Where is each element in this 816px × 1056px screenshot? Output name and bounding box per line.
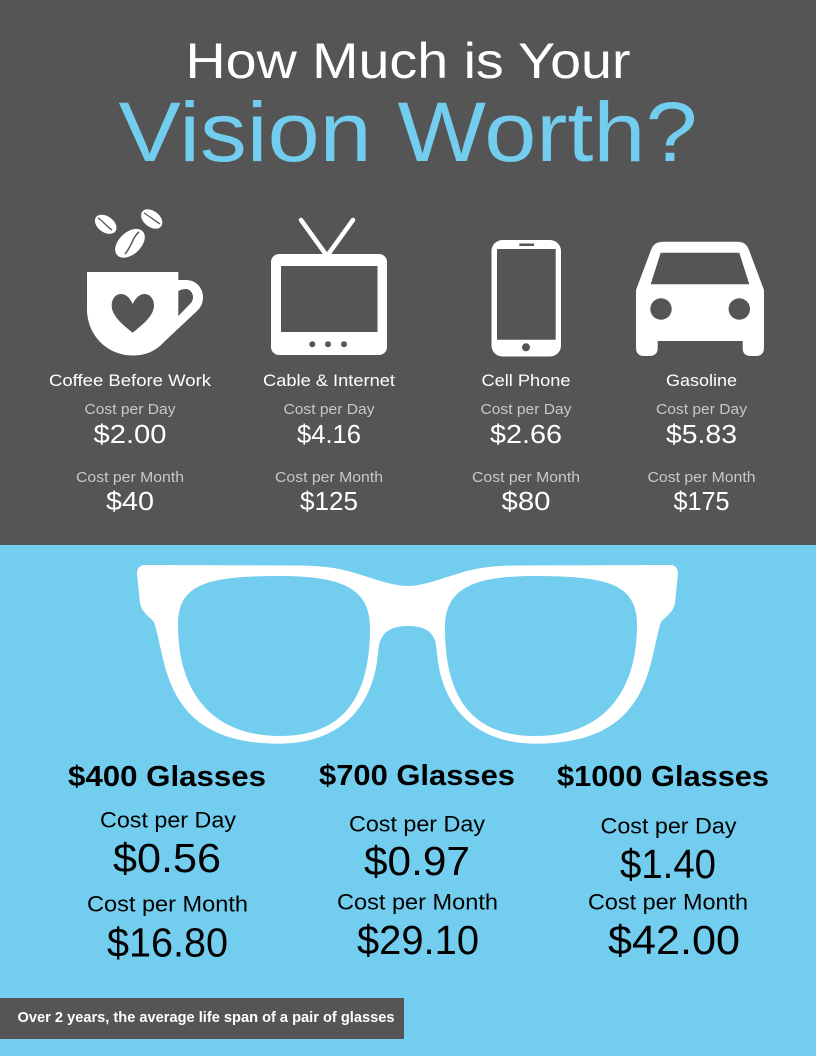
- text block: cable costs: Cost per Month: [275, 469, 383, 486]
- text block: $700 glasses: Cost per Month: [337, 890, 498, 914]
- text block: coffee costs: $40: [106, 486, 154, 516]
- text block: $1000 glasses: $42.00: [608, 917, 740, 963]
- text block: $700 glasses: $700 Glasses: [319, 760, 515, 792]
- icon: smartphone: [492, 240, 561, 357]
- callout: footnote bar: [0, 998, 404, 1039]
- icon: coffee cup with beans: [87, 205, 203, 356]
- text block: cell phone costs: [472, 371, 580, 516]
- title: Vision Worth?: [118, 85, 698, 179]
- text block: cable costs: Cable & Internet: [263, 371, 395, 390]
- text block: $1000 glasses: Cost per Day: [600, 814, 736, 838]
- title: [118, 33, 698, 179]
- text block: $700 glasses: [319, 760, 515, 963]
- text block: gasoline costs: [648, 371, 756, 516]
- text block: coffee costs: Coffee Before Work: [49, 371, 212, 390]
- text block: $1000 glasses: [557, 761, 769, 963]
- text block: $400 glasses: $0.56: [113, 835, 221, 881]
- icon: eyeglasses: [137, 565, 678, 744]
- text block: cell phone costs: $2.66: [490, 419, 562, 449]
- text block: cable costs: [263, 371, 395, 516]
- text block: gasoline costs: Gasoline: [666, 371, 737, 390]
- callout: footnote bar: Over 2 years, the average life span of a pair of glasses: [18, 1009, 394, 1026]
- panel: blue glasses background: [0, 545, 816, 1056]
- panel: dark header background: [0, 0, 816, 545]
- text block: $400 glasses: $400 Glasses: [68, 761, 266, 793]
- text block: $400 glasses: Cost per Month: [87, 892, 248, 916]
- text block: cable costs: $125: [300, 486, 358, 516]
- text block: coffee costs: Cost per Month: [76, 469, 184, 486]
- text block: $1000 glasses: $1000 Glasses: [557, 761, 769, 793]
- title: How Much is Your: [186, 33, 630, 89]
- text block: gasoline costs: $175: [674, 486, 730, 516]
- text block: cell phone costs: Cell Phone: [482, 371, 570, 390]
- text block: gasoline costs: $5.83: [666, 419, 737, 449]
- text block: $1000 glasses: Cost per Month: [588, 890, 748, 914]
- text block: coffee costs: $2.00: [94, 419, 166, 449]
- text block: $700 glasses: $29.10: [357, 917, 479, 963]
- icon: television: [271, 220, 387, 355]
- text block: cable costs: Cost per Day: [284, 401, 375, 418]
- text block: $700 glasses: $0.97: [364, 838, 470, 884]
- text block: $700 glasses: Cost per Day: [349, 812, 485, 836]
- text block: $1000 glasses: $1.40: [620, 841, 716, 887]
- text block: cell phone costs: $80: [502, 486, 550, 516]
- text block: gasoline costs: Cost per Day: [656, 401, 748, 418]
- text block: gasoline costs: Cost per Month: [648, 469, 756, 486]
- text block: $400 glasses: $16.80: [107, 920, 228, 966]
- text block: $400 glasses: Cost per Day: [100, 808, 236, 832]
- text block: coffee costs: [49, 371, 212, 516]
- text block: $400 glasses: [68, 761, 266, 966]
- text block: coffee costs: Cost per Day: [84, 401, 176, 418]
- text block: cell phone costs: Cost per Day: [480, 401, 572, 418]
- icon: car: [636, 242, 764, 356]
- text block: cell phone costs: Cost per Month: [472, 469, 580, 486]
- text block: cable costs: $4.16: [297, 419, 361, 449]
